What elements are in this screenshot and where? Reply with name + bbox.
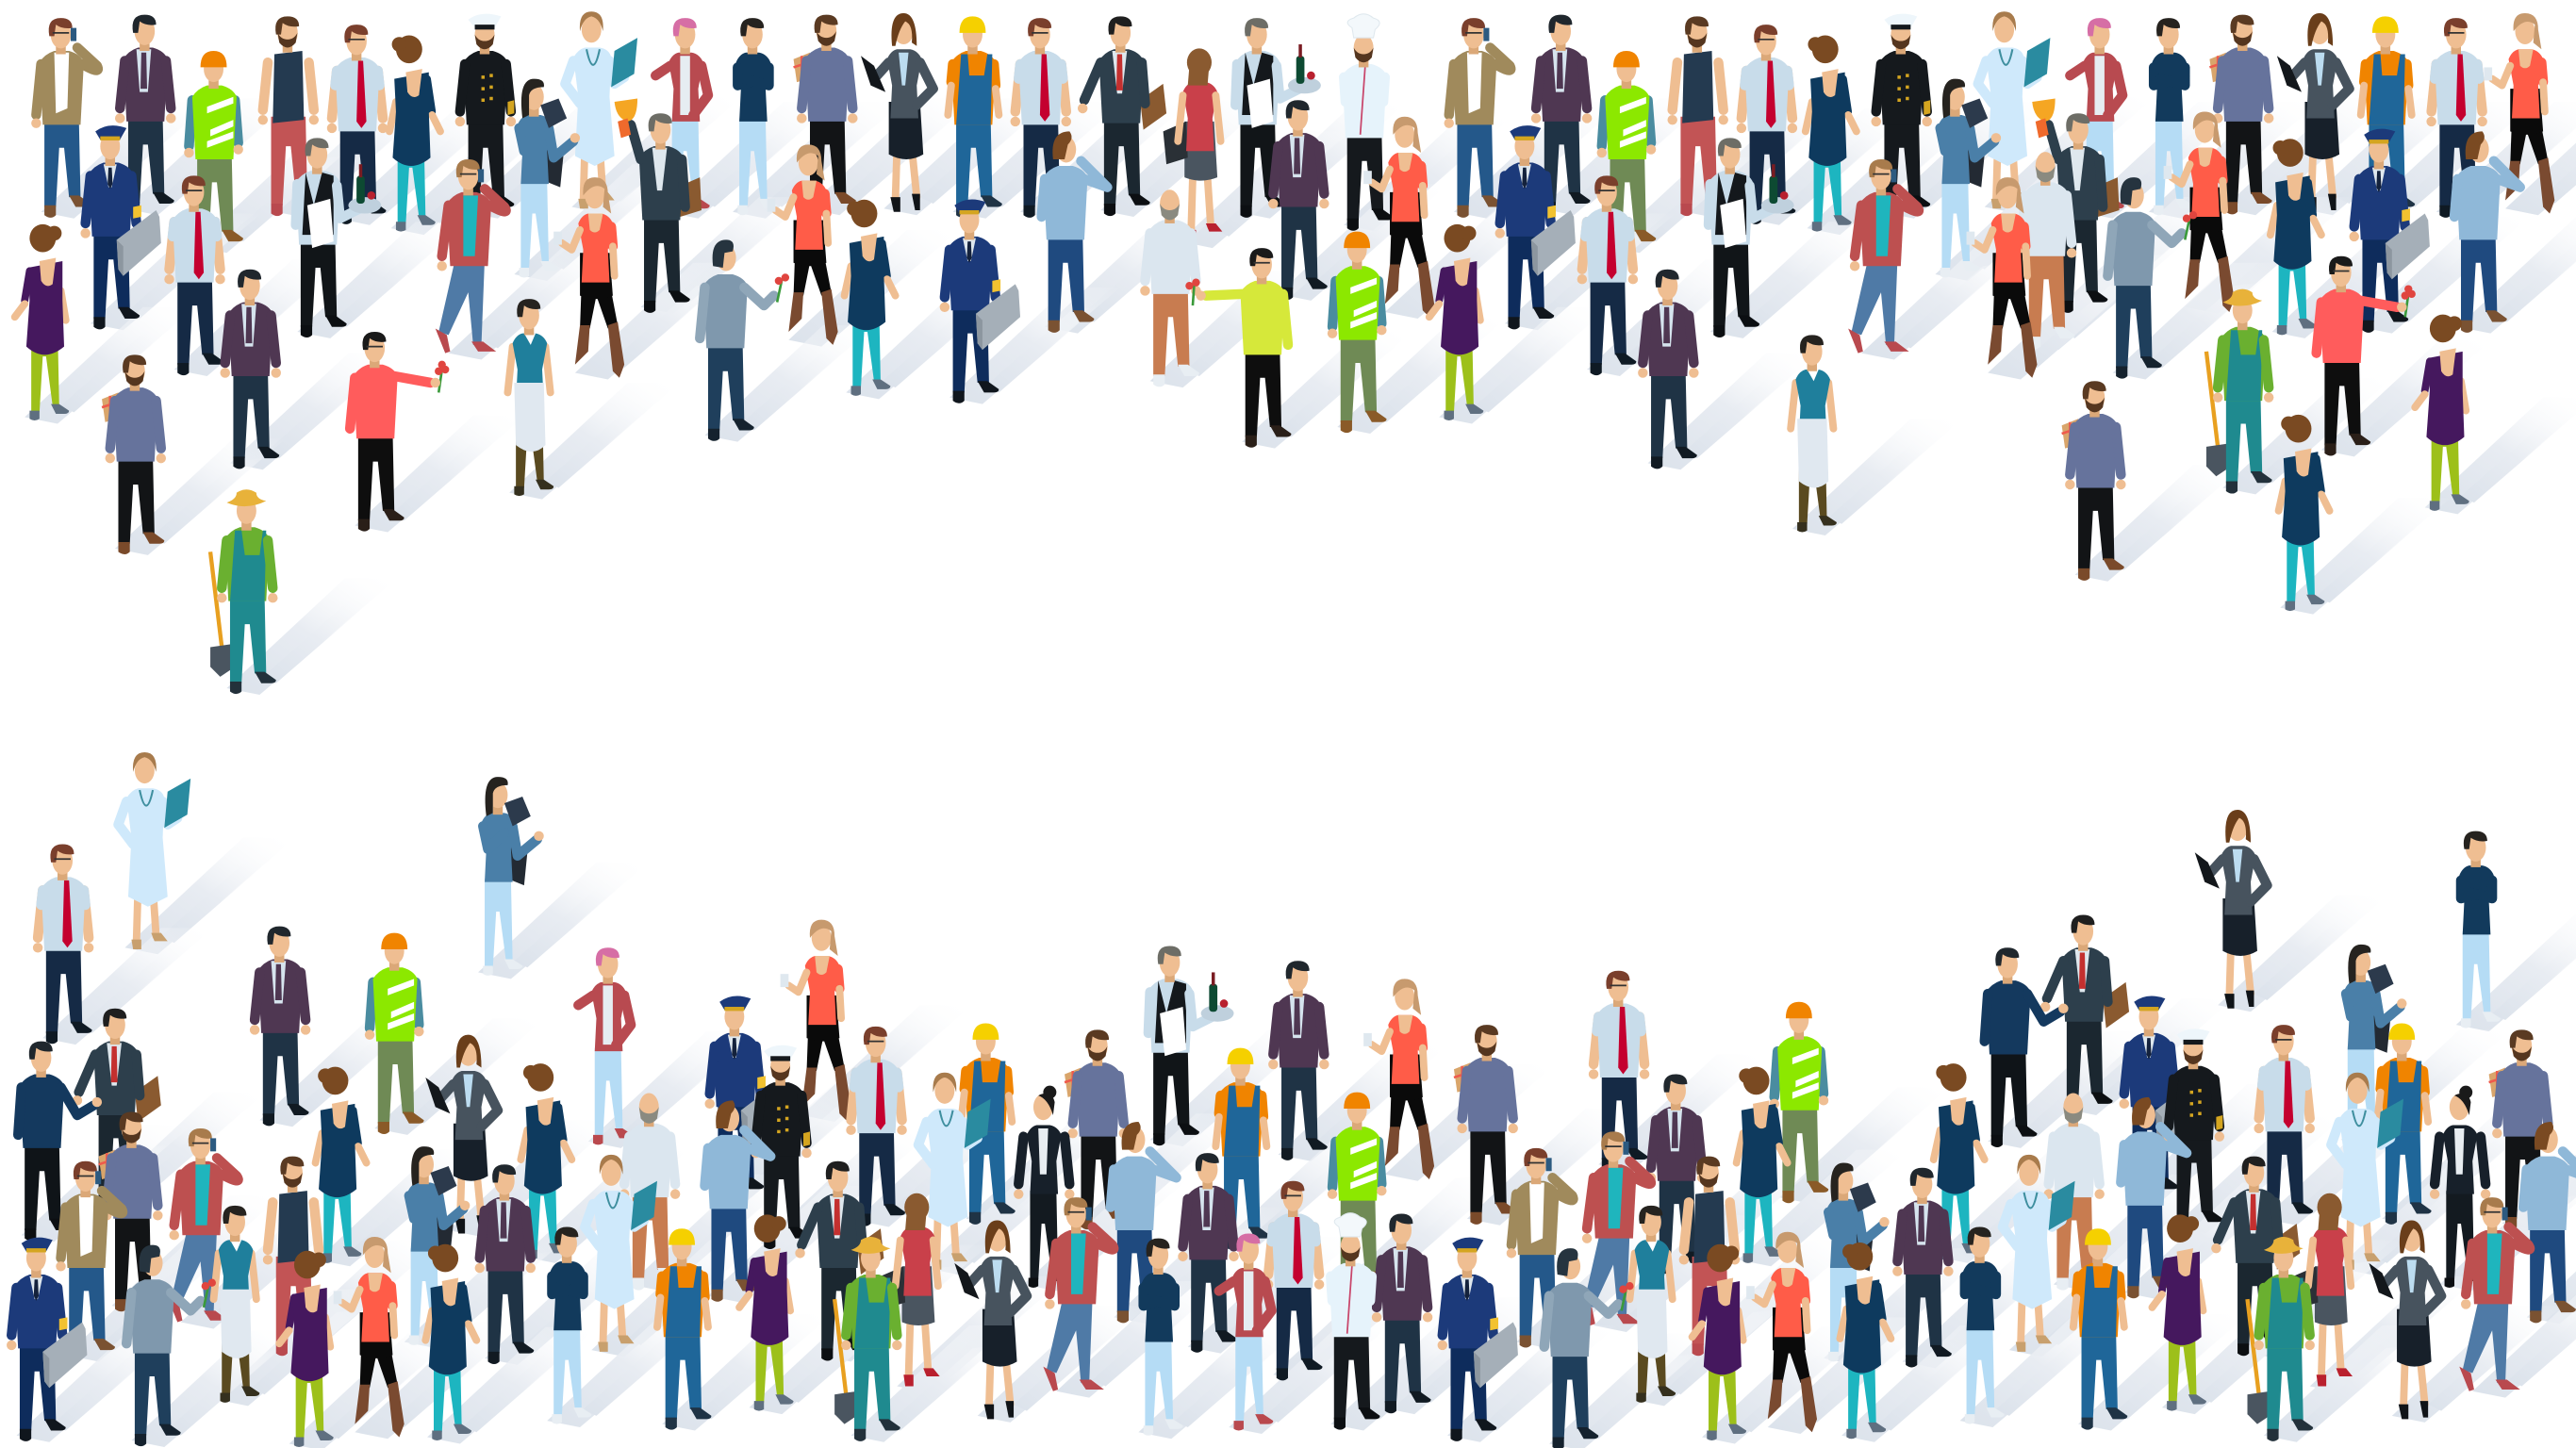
- person: coral woman: [2164, 111, 2235, 312]
- person: pilot: [940, 200, 1020, 403]
- person: trophy: [615, 99, 702, 313]
- person: dress: [520, 1063, 571, 1259]
- person: red top: [2293, 1193, 2353, 1386]
- person: farmer: [210, 489, 277, 694]
- person: dress: [1737, 1067, 1788, 1263]
- person: businessman: [795, 1161, 883, 1360]
- person: shirt tie: [1577, 175, 1638, 375]
- person: waiter: [1148, 946, 1234, 1145]
- person: grey jacket: [2195, 810, 2267, 1009]
- person: red top: [1164, 48, 1222, 241]
- person: doctor: [565, 11, 637, 208]
- person: cardigan: [31, 18, 98, 218]
- person: crossed arms: [1963, 1226, 2005, 1424]
- person: dress: [425, 1244, 476, 1440]
- person: purple dress: [2415, 315, 2469, 511]
- person: chef: [1342, 14, 1394, 231]
- person: doctor: [118, 752, 190, 949]
- person: tank top: [263, 1157, 323, 1356]
- person: coral woman: [1967, 177, 2037, 378]
- person: shirt tie: [2426, 18, 2487, 218]
- person: purple suit: [1178, 1153, 1239, 1353]
- person: waitress: [507, 299, 553, 496]
- person: businessman: [1078, 16, 1166, 216]
- ground shadows: lower crowd: [16, 838, 2576, 1448]
- person: captain: [1872, 14, 1932, 218]
- person: bald man: [2043, 1093, 2105, 1291]
- person: grey jacket: [861, 13, 933, 212]
- person: shirt tie: [1011, 18, 1071, 218]
- person: dress: [845, 200, 896, 396]
- person: waiter: [1235, 18, 1321, 218]
- person: yellow flowers: [1185, 248, 1291, 448]
- person: shirt tie: [2254, 1025, 2315, 1225]
- person: flowers: [2317, 256, 2416, 455]
- person: purple dress: [15, 224, 69, 420]
- person: doctor: [585, 1155, 657, 1352]
- upper crowd of professionals: [15, 11, 2554, 694]
- person: walking: [2459, 1197, 2530, 1391]
- person: crossed arms: [736, 18, 777, 215]
- person: vest: [1769, 1002, 1828, 1203]
- person: overalls: [948, 16, 1002, 218]
- person: businessman: [73, 1009, 161, 1208]
- person: coral woman: [1746, 1232, 1817, 1432]
- person: waitress: [214, 1206, 259, 1403]
- person: cardigan: [1445, 18, 1511, 218]
- person: flowers: [350, 332, 449, 532]
- person: grey man: [700, 239, 789, 441]
- person: sweater: [99, 1112, 163, 1311]
- person: vest: [1597, 51, 1656, 252]
- person: sweater: [2209, 15, 2273, 214]
- person: shirt tie: [164, 175, 225, 375]
- person: dress: [389, 35, 440, 232]
- person: crossed arms: [2152, 18, 2193, 215]
- person: farmer: [2206, 289, 2273, 494]
- person: purple dress: [739, 1214, 794, 1411]
- person: purple dress: [2152, 1214, 2206, 1411]
- person: black suit: [2430, 1086, 2490, 1288]
- person: pilot: [1495, 125, 1576, 329]
- person: waiter: [1709, 138, 1794, 337]
- person: dress: [1934, 1063, 1985, 1259]
- person: purple dress: [1693, 1244, 1746, 1440]
- person: purple suit: [1372, 1214, 1432, 1413]
- person: businessman: [2040, 914, 2129, 1114]
- person: back man: [2523, 1122, 2576, 1323]
- person: walking: [1580, 1131, 1651, 1325]
- person: pink hair: [1219, 1233, 1273, 1431]
- person: bald man: [2016, 152, 2076, 349]
- person: pilot: [7, 1238, 87, 1441]
- person: cardigan: [1507, 1148, 1573, 1348]
- person: grey jacket: [954, 1221, 1027, 1419]
- person: black suit: [1014, 1086, 1075, 1288]
- person: businessman: [2211, 1157, 2300, 1356]
- person: purple suit: [250, 927, 310, 1126]
- person: pilot: [2350, 129, 2430, 333]
- person: overalls: [961, 1023, 1016, 1225]
- person: sweater: [1065, 1029, 1129, 1229]
- person: doctor: [2331, 1073, 2403, 1270]
- person: shirt tie: [1263, 1181, 1324, 1380]
- person: grey jacket: [425, 1035, 498, 1233]
- person: grey man: [2107, 177, 2197, 379]
- person: tank top: [258, 16, 319, 216]
- person: camera: [1826, 1163, 1890, 1361]
- person: back man: [704, 1100, 770, 1302]
- person: dress: [1840, 1242, 1891, 1439]
- person: crossed arms: [2459, 831, 2501, 1028]
- person: grey jacket: [2277, 13, 2350, 212]
- person: bald man: [1140, 189, 1201, 387]
- person: back man: [2454, 131, 2520, 333]
- person: purple dress: [1429, 224, 1483, 420]
- person: pilot: [1438, 1238, 1518, 1441]
- person: overalls: [2361, 16, 2415, 218]
- person: crossed arms: [1142, 1239, 1182, 1436]
- person: camera: [407, 1146, 470, 1345]
- person: shirt tie: [1589, 971, 1649, 1170]
- person: coral woman: [2484, 13, 2554, 213]
- person: camera: [482, 777, 544, 976]
- person: pilot: [704, 996, 785, 1200]
- person: tank top: [1679, 1157, 1740, 1356]
- person: walking: [436, 159, 506, 354]
- person: sweater: [102, 354, 166, 554]
- person: dress: [2271, 139, 2321, 335]
- person: vest: [1328, 232, 1387, 433]
- person: red top: [881, 1193, 940, 1386]
- person: waitress: [1791, 335, 1837, 533]
- person: navy man: [1985, 947, 2069, 1147]
- person: walking: [1043, 1197, 1114, 1391]
- person: overalls: [2073, 1228, 2127, 1430]
- person: grey man: [126, 1245, 216, 1446]
- person: camera: [1939, 79, 2001, 277]
- person: purple suit: [115, 15, 175, 214]
- person: pink hair: [2070, 18, 2124, 215]
- person: vest: [1328, 1093, 1387, 1293]
- person: cardigan: [56, 1161, 123, 1360]
- person: overalls: [2377, 1023, 2432, 1225]
- person: camera: [2344, 945, 2406, 1144]
- person: back man: [2121, 1097, 2187, 1298]
- person: waitress: [1629, 1206, 1676, 1403]
- person: dress: [2279, 415, 2330, 611]
- person: dress: [1806, 35, 1857, 232]
- person: trophy: [2032, 99, 2120, 313]
- person: navy man: [18, 1042, 102, 1241]
- person: bald man: [619, 1093, 680, 1291]
- person: coral woman: [1363, 117, 1434, 317]
- person: sweater: [794, 15, 858, 214]
- person: purple suit: [1531, 15, 1592, 214]
- person: shirt tie: [846, 1027, 907, 1226]
- person: farmer: [834, 1237, 902, 1441]
- person: captain: [2164, 1028, 2224, 1233]
- person: dress: [316, 1067, 367, 1263]
- person: walking: [168, 1128, 239, 1323]
- person: coral woman: [768, 144, 838, 345]
- person: waiter: [296, 138, 381, 337]
- person: coral woman: [553, 177, 624, 378]
- ground shadows: upper crowd: [25, 97, 2576, 695]
- lower crowd of professionals: [7, 752, 2576, 1448]
- person: purple suit: [1268, 100, 1329, 300]
- person: walking: [1848, 159, 1919, 354]
- person: vest: [365, 933, 424, 1134]
- person: doctor: [918, 1073, 991, 1270]
- person: farmer: [2247, 1237, 2315, 1441]
- person: sweater: [2489, 1029, 2553, 1229]
- person: overalls: [1215, 1048, 1270, 1249]
- person: grey jacket: [2369, 1221, 2441, 1419]
- person: crossed arms: [551, 1226, 591, 1424]
- person: doctor: [2003, 1155, 2075, 1352]
- person: camera: [518, 79, 580, 277]
- person: pink hair: [655, 18, 710, 215]
- person: purple suit: [1892, 1168, 1954, 1367]
- person: purple suit: [1268, 961, 1329, 1160]
- person: coral woman: [1363, 979, 1434, 1179]
- person: back man: [1111, 1122, 1177, 1323]
- person: sweater: [1454, 1025, 1518, 1225]
- person: coral woman: [781, 920, 851, 1120]
- person: sweater: [2062, 381, 2126, 581]
- person: coral woman: [334, 1237, 405, 1438]
- person: captain: [455, 14, 516, 218]
- person: purple suit: [221, 270, 281, 469]
- person: purple dress: [279, 1251, 334, 1447]
- person: pilot: [80, 125, 161, 329]
- person: captain: [751, 1045, 812, 1249]
- person: tank top: [1667, 16, 1728, 216]
- person: pilot: [2120, 996, 2200, 1200]
- person: pink hair: [578, 947, 633, 1144]
- person: shirt tie: [327, 25, 388, 224]
- person: back man: [1042, 131, 1107, 333]
- person: purple suit: [1646, 1074, 1707, 1274]
- person: chef: [1329, 1213, 1380, 1430]
- person: grey man: [1544, 1248, 1634, 1448]
- person: vest: [184, 51, 243, 252]
- person: purple suit: [475, 1164, 536, 1364]
- person: shirt tie: [1737, 25, 1797, 224]
- person: overalls: [657, 1228, 711, 1430]
- person: doctor: [1978, 11, 2050, 208]
- person: purple suit: [1638, 270, 1699, 469]
- person: shirt tie: [33, 845, 93, 1044]
